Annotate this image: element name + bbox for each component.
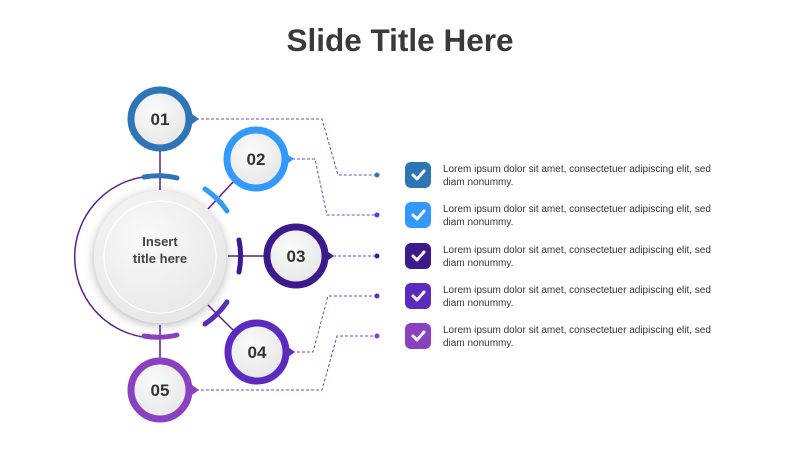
node 04 bbox=[228, 323, 295, 381]
connectors bbox=[75, 150, 264, 358]
title: Slide Title Here bbox=[286, 22, 514, 58]
center circle: Insert bbox=[142, 234, 178, 249]
center circle: title here bbox=[133, 251, 187, 266]
text 2: Lorem ipsum dolor sit amet, consectetuer adipiscing elit, sed diam nonummy. bbox=[443, 204, 711, 228]
node 05: 05 bbox=[151, 381, 169, 400]
node 02 bbox=[227, 130, 294, 188]
node 05 bbox=[131, 361, 199, 419]
node 03: 03 bbox=[287, 247, 305, 266]
checkbox icons bbox=[405, 162, 431, 349]
node 01: 01 bbox=[151, 110, 169, 129]
node 03 bbox=[267, 227, 334, 285]
node 02: 02 bbox=[247, 150, 265, 169]
dashed leader lines bbox=[196, 119, 377, 390]
text 1: Lorem ipsum dolor sit amet, consectetuer adipiscing elit, sed diam nonummy. bbox=[443, 164, 711, 188]
text 5: Lorem ipsum dolor sit amet, consectetuer adipiscing elit, sed diam nonummy. bbox=[443, 325, 711, 348]
node 01 bbox=[131, 90, 199, 148]
text 3: Lorem ipsum dolor sit amet, consectetuer adipiscing elit, sed diam nonummy. bbox=[443, 245, 711, 268]
center circle bbox=[94, 191, 226, 323]
node 04: 04 bbox=[248, 343, 267, 362]
arc ticks bbox=[144, 176, 241, 337]
text 4: Lorem ipsum dolor sit amet, consectetuer adipiscing elit, sed diam nonummy. bbox=[443, 285, 711, 308]
